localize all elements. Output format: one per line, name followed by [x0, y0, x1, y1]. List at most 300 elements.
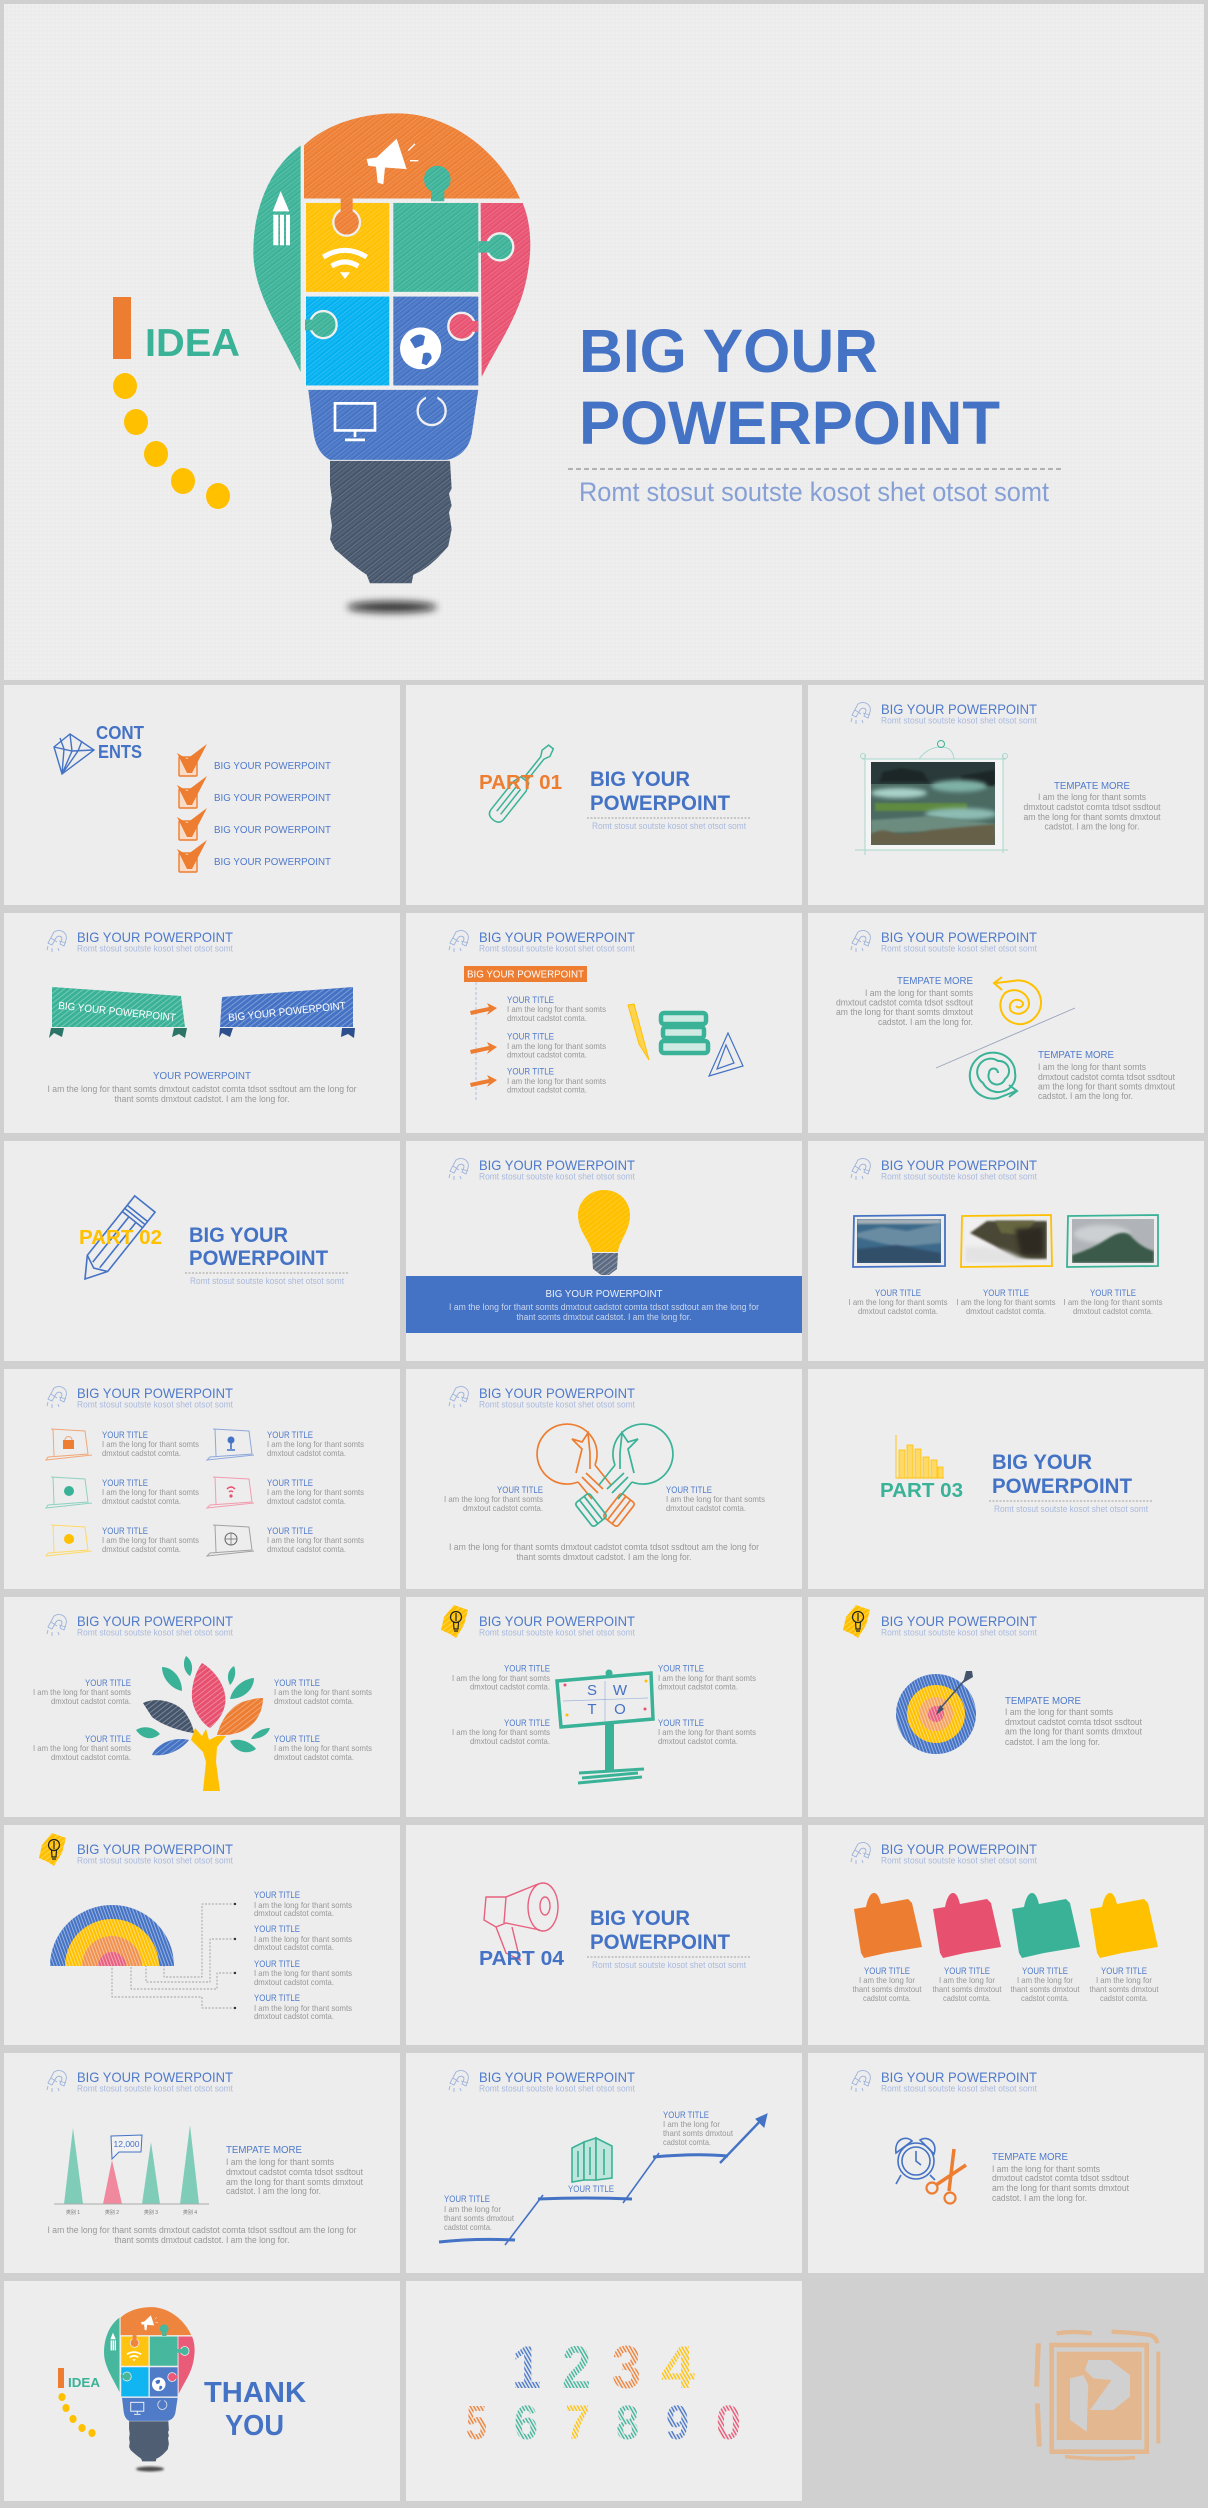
chart: 类别 1 [66, 2209, 80, 2216]
left texts [452, 1664, 550, 1746]
panel: staircase [406, 2053, 802, 2273]
panel: hanging picture [808, 685, 1204, 905]
text block [226, 2145, 363, 2196]
icon: books [661, 1013, 708, 1053]
panel: clock and scissors [808, 2053, 1204, 2273]
item texts: dmxtout cadstot comta. [254, 2011, 334, 2021]
header: BIG YOUR POWERPOINT [77, 2069, 233, 2085]
icon: bar chart [896, 1435, 944, 1478]
photo: green mountain [1067, 1215, 1158, 1267]
text block: TEMPATE MORE [1054, 781, 1130, 792]
left text: thant somts dmxtout [444, 2213, 515, 2223]
captions: thant somts dmxtout [932, 1984, 1002, 1994]
right text [666, 1485, 765, 1513]
left text: YOUR TITLE [444, 2194, 490, 2205]
items: I am the long for thant somts [507, 1076, 606, 1086]
idea mark: IDEA [145, 322, 240, 365]
text block: cadstot. I am the long for. [992, 2193, 1087, 2203]
title: BIG YOUR [579, 317, 878, 385]
text block: bottom [1038, 1050, 1175, 1101]
item texts: dmxtout cadstot comta. [102, 1496, 181, 1506]
text block: dmxtout cadstot comta tdsot ssdtout [1005, 1717, 1142, 1727]
icon: rainbow [50, 1905, 174, 1966]
title: POWERPOINT [590, 1931, 730, 1954]
callout [111, 2135, 142, 2159]
chart: 类别 4 [183, 2209, 197, 2216]
icon: puzzle light bulb [103, 2306, 197, 2472]
item texts: YOUR TITLE [102, 1526, 148, 1537]
header: BIG YOUR POWERPOINT [881, 1157, 1037, 1173]
heading [96, 723, 144, 762]
item texts: YOUR TITLE [102, 1430, 148, 1441]
logo stamp [1037, 2332, 1158, 2459]
header [47, 1613, 233, 1638]
header: Romt stosut soutste kosot shet otsot somt [479, 1400, 635, 1410]
chart: 类别 2 [105, 2209, 119, 2216]
icon: pencil [628, 1004, 649, 1060]
left texts: YOUR TITLE [85, 1678, 131, 1689]
item texts: I am the long for thant somts [254, 1934, 352, 1944]
left text [444, 2194, 515, 2232]
panel: part 03 [808, 1369, 1204, 1589]
header: BIG YOUR POWERPOINT [77, 929, 233, 945]
heading: CONT [96, 723, 144, 743]
icon: yellow bulb [578, 1190, 630, 1275]
header [851, 701, 1037, 726]
title: POWERPOINT [579, 389, 1000, 457]
text block: top: am the long for thant somts dmxtout [836, 1007, 973, 1017]
captions: YOUR TITLE [983, 1288, 1029, 1299]
checklist: BIG YOUR POWERPOINT [214, 760, 332, 772]
right texts [658, 1664, 756, 1746]
header: Romt stosut soutste kosot shet otsot somt [77, 1856, 233, 1866]
left text [444, 1485, 543, 1513]
chart [54, 2125, 209, 2216]
connectors [112, 1903, 236, 2009]
callout: 12,000 [114, 2140, 140, 2149]
text block: I am the long for thant somts [992, 2164, 1100, 2174]
item texts: dmxtout cadstot comta. [267, 1544, 346, 1554]
photo: blue mountains [853, 1215, 945, 1267]
item texts: dmxtout cadstot comta. [267, 1496, 346, 1506]
subtitle: Romt stosut soutste kosot shet otsot somt [579, 477, 1049, 507]
left texts: I am the long for thant somts [33, 1687, 131, 1697]
numbers row 2: 9 [666, 2397, 689, 2450]
header: BIG YOUR POWERPOINT [77, 1613, 233, 1629]
captions: I am the long for thant somts [1064, 1297, 1162, 1307]
header [47, 1385, 233, 1410]
idea mark: IDEA [68, 2375, 101, 2390]
title [204, 2377, 306, 2442]
captions: I am the long for [859, 1975, 915, 1985]
panel: thank you [4, 2281, 400, 2501]
right text: I am the long for thant somts [666, 1494, 765, 1504]
items: YOUR TITLE [507, 1066, 554, 1078]
text block: top [836, 976, 973, 1027]
text block: bottom: TEMPATE MORE [1038, 1050, 1114, 1061]
right texts: dmxtout cadstot comta. [658, 1682, 738, 1692]
text block [1005, 1696, 1142, 1747]
right texts: YOUR TITLE [274, 1734, 320, 1745]
text block: TEMPATE MORE [1005, 1696, 1081, 1707]
right texts: dmxtout cadstot comta. [274, 1696, 354, 1706]
captions: YOUR TITLE [1022, 1966, 1068, 1977]
item texts: dmxtout cadstot comta. [102, 1448, 181, 1458]
checklist: BIG YOUR POWERPOINT [214, 792, 332, 804]
panel: ribbons [4, 913, 400, 1133]
icon: set square [709, 1033, 743, 1076]
header: Romt stosut soutste kosot shet otsot somt [77, 1628, 233, 1638]
header [851, 1157, 1037, 1182]
header [851, 929, 1037, 954]
panel: contents [4, 685, 400, 905]
right texts: YOUR TITLE [658, 1664, 704, 1674]
band text: thant somts dmxtout cadstot. I am the long for. [516, 1312, 692, 1322]
captions: I am the long for [1096, 1975, 1152, 1985]
text block [1024, 781, 1161, 832]
header [449, 1157, 635, 1182]
text block: bottom: cadstot. I am the long for. [1038, 1091, 1133, 1101]
right text [663, 2110, 734, 2147]
text block: YOUR POWERPOINT [153, 1071, 251, 1082]
item texts: I am the long for thant somts [102, 1535, 199, 1545]
items: I am the long for thant somts [507, 1004, 606, 1014]
text block: bottom: dmxtout cadstot comta tdsot ssdtout [1038, 1072, 1175, 1082]
subtitle: Romt stosut soutste kosot shet otsot somt [190, 1276, 344, 1286]
captions: I am the long for thant somts [848, 1297, 948, 1307]
captions: dmxtout cadstot comta. [966, 1306, 1046, 1316]
item texts [254, 1890, 352, 2021]
orange label: BIG YOUR POWERPOINT [467, 968, 585, 980]
panel: six icon items [4, 1369, 400, 1589]
left texts: YOUR TITLE [504, 1718, 550, 1729]
panel: tree [4, 1597, 400, 1817]
text block: cadstot. I am the long for. [1044, 822, 1140, 832]
icon: yellow spiral [994, 977, 1041, 1024]
book caption: YOUR TITLE [568, 2184, 614, 2195]
header: Romt stosut soutste kosot shet otsot somt [479, 2084, 635, 2094]
icon: billboard: S [587, 1682, 597, 1699]
bottom text [48, 2225, 356, 2245]
text block: I am the long for thant somts [1038, 792, 1146, 802]
photo: cliff in fog [961, 1215, 1052, 1267]
header: Romt stosut soutste kosot shet otsot somt [881, 716, 1037, 726]
header: Romt stosut soutste kosot shet otsot somt [479, 1628, 635, 1638]
item texts: YOUR TITLE [267, 1430, 313, 1441]
right text: I am the long for [663, 2119, 720, 2129]
text block: top: I am the long for thant somts [865, 988, 973, 998]
items: dmxtout cadstot comta. [507, 1013, 587, 1023]
captions: dmxtout cadstot comta. [858, 1306, 938, 1316]
header: BIG YOUR POWERPOINT [881, 1841, 1037, 1857]
text block [48, 1071, 356, 1104]
item texts: YOUR TITLE [254, 1890, 300, 1901]
item texts: dmxtout cadstot comta. [254, 1977, 334, 1987]
band text: I am the long for thant somts dmxtout cadstot comta tdsot ssdtout am the long for [449, 1302, 759, 1312]
header [843, 1605, 1037, 1638]
captions: cadstot comta. [1100, 1993, 1148, 2003]
header: Romt stosut soutste kosot shet otsot somt [881, 2084, 1037, 2094]
part label: PART 02 [79, 1227, 162, 1249]
header: Romt stosut soutste kosot shet otsot somt [77, 2084, 233, 2094]
numbers row 2: 7 [565, 2397, 590, 2450]
header: Romt stosut soutste kosot shet otsot somt [881, 1856, 1037, 1866]
left texts: YOUR TITLE [85, 1734, 131, 1745]
panel: part 02 [4, 1141, 400, 1361]
item texts: I am the long for thant somts [102, 1439, 199, 1449]
text block: cadstot. I am the long for. [226, 2186, 321, 2196]
icon: target [896, 1671, 976, 1754]
captions: I am the long for thant somts [956, 1297, 1056, 1307]
text block: top: dmxtout cadstot comta tdsot ssdtout [836, 998, 973, 1008]
checklist: BIG YOUR POWERPOINT [214, 856, 332, 868]
item texts: I am the long for thant somts [254, 2003, 352, 2013]
icon: teal spiral [970, 1053, 1017, 1099]
text block: dmxtout cadstot comta tdsot ssdtout [1024, 802, 1161, 812]
header: BIG YOUR POWERPOINT [479, 929, 635, 945]
captions [852, 1966, 1159, 2003]
header [449, 929, 635, 954]
header: BIG YOUR POWERPOINT [479, 1385, 635, 1401]
icon: billboard: W [613, 1682, 628, 1699]
header [851, 2069, 1037, 2094]
photo [871, 762, 995, 845]
icon: billboard: T [587, 1701, 597, 1718]
captions: thant somts dmxtout [1090, 1984, 1159, 1994]
header: BIG YOUR POWERPOINT [479, 1613, 635, 1629]
left texts: I am the long for thant somts [33, 1743, 131, 1753]
title: BIG YOUR [189, 1224, 288, 1247]
header: BIG YOUR POWERPOINT [881, 701, 1037, 717]
left texts: dmxtout cadstot comta. [51, 1752, 131, 1762]
left text: I am the long for thant somts [444, 1494, 543, 1504]
title: YOU [225, 2410, 284, 2442]
item texts: YOUR TITLE [102, 1478, 148, 1489]
numbers row 2: 8 [616, 2397, 639, 2450]
title: THANK [204, 2377, 306, 2409]
left texts: dmxtout cadstot comta. [470, 1682, 550, 1692]
left texts: I am the long for thant somts [452, 1673, 550, 1683]
ribbon: blue: BIG YOUR POWERPOINT [228, 1000, 347, 1024]
numbers row 1: 4 [661, 2334, 696, 2401]
items: I am the long for thant somts [507, 1041, 606, 1051]
left texts: I am the long for thant somts [452, 1727, 550, 1737]
chart: 类别 3 [144, 2209, 158, 2216]
left text: I am the long for [444, 2204, 501, 2214]
subtitle: Romt stosut soutste kosot shet otsot somt [592, 1960, 746, 1970]
item texts: I am the long for thant somts [267, 1535, 364, 1545]
text block: dmxtout cadstot comta tdsot ssdtout [992, 2173, 1129, 2183]
item texts: I am the long for thant somts [267, 1439, 364, 1449]
header: Romt stosut soutste kosot shet otsot somt [479, 1172, 635, 1182]
left texts [33, 1678, 131, 1762]
header [449, 1385, 635, 1410]
right text: dmxtout cadstot comta. [666, 1503, 746, 1513]
text block: I am the long for thant somts dmxtout cadstot comta tdsot ssdtout am the long for [48, 1084, 356, 1094]
item texts: dmxtout cadstot comta. [267, 1448, 346, 1458]
bottom text [449, 1542, 759, 1562]
idea mark [58, 2368, 101, 2390]
text block: am the long for thant somts dmxtout [992, 2183, 1129, 2193]
right texts: I am the long for thant somts [274, 1687, 372, 1697]
text block: am the long for thant somts dmxtout [226, 2177, 363, 2187]
left texts: dmxtout cadstot comta. [51, 1696, 131, 1706]
text block: am the long for thant somts dmxtout [1005, 1726, 1142, 1736]
text block: am the long for thant somts dmxtout [1024, 812, 1161, 822]
icon: handshake bulbs [537, 1424, 673, 1527]
header: Romt stosut soutste kosot shet otsot somt [77, 944, 233, 954]
header [851, 1841, 1037, 1866]
title: BIG YOUR [590, 1907, 690, 1930]
item texts: YOUR TITLE [267, 1478, 313, 1489]
title [189, 1224, 328, 1270]
item texts [102, 1430, 364, 1554]
ribbon: teal: BIG YOUR POWERPOINT [58, 1000, 177, 1024]
captions: I am the long for [939, 1975, 995, 1985]
header: BIG YOUR POWERPOINT [881, 929, 1037, 945]
header: Romt stosut soutste kosot shet otsot somt [881, 944, 1037, 954]
icon: puzzle light bulb [250, 110, 537, 612]
header [47, 929, 233, 954]
right texts: I am the long for thant somts [658, 1673, 756, 1683]
item texts: YOUR TITLE [254, 1993, 300, 2004]
captions: thant somts dmxtout [852, 1984, 922, 1994]
band [406, 1276, 802, 1333]
picture frame [855, 740, 1008, 855]
captions [848, 1288, 1162, 1316]
panel: three photos [808, 1141, 1204, 1361]
title [590, 1907, 730, 1954]
subtitle: Romt stosut soutste kosot shet otsot somt [994, 1504, 1148, 1514]
part label: PART 04 [479, 1948, 565, 1970]
panel: target [808, 1597, 1204, 1817]
panel: four notes [808, 1825, 1204, 2045]
ribbon: teal [49, 987, 187, 1038]
text block: top: TEMPATE MORE [897, 976, 973, 987]
captions: YOUR TITLE [1101, 1966, 1147, 1977]
yellow dots [113, 373, 230, 509]
panel: handshake bulbs [406, 1369, 802, 1589]
band text: BIG YOUR POWERPOINT [546, 1288, 663, 1300]
numbers row 1: 3 [612, 2334, 641, 2401]
text block: I am the long for thant somts [1005, 1707, 1113, 1717]
right texts: I am the long for thant somts [658, 1727, 756, 1737]
header: BIG YOUR POWERPOINT [881, 1613, 1037, 1629]
items: YOUR TITLE [507, 995, 554, 1006]
panel: blue band [406, 1141, 802, 1361]
panel: timeline list [406, 913, 802, 1133]
checklist [177, 744, 332, 872]
text block: dmxtout cadstot comta tdsot ssdtout [226, 2167, 363, 2177]
numbers row 2 [466, 2397, 741, 2450]
right texts: YOUR TITLE [274, 1678, 320, 1689]
captions: cadstot comta. [863, 1993, 911, 2003]
icon: scissors [926, 2149, 966, 2204]
numbers row 2: 0 [716, 2397, 741, 2450]
icon: billboard [557, 1670, 653, 1783]
captions: thant somts dmxtout [1010, 1984, 1080, 1994]
left texts: YOUR TITLE [504, 1664, 550, 1674]
text block: cadstot. I am the long for. [1005, 1737, 1100, 1747]
icon: tree of leaves [136, 1656, 270, 1791]
captions: cadstot comta. [1021, 1993, 1069, 2003]
text block: TEMPATE MORE [226, 2145, 302, 2156]
checklist: BIG YOUR POWERPOINT [214, 824, 332, 836]
title [590, 768, 730, 815]
part label: PART 03 [880, 1480, 963, 1502]
subtitle: Romt stosut soutste kosot shet otsot somt [592, 821, 746, 831]
right texts [274, 1678, 372, 1762]
icon: megaphone [484, 1883, 558, 1960]
text block: I am the long for thant somts [226, 2157, 334, 2167]
captions: I am the long for [1017, 1975, 1073, 1985]
text block: bottom: I am the long for thant somts [1038, 1062, 1146, 1072]
header: BIG YOUR POWERPOINT [77, 1841, 233, 1857]
text block: thant somts dmxtout cadstot. I am the long for. [114, 1094, 290, 1104]
panel: hero slide [4, 4, 1204, 680]
heading: ENTS [98, 742, 142, 762]
captions: YOUR TITLE [944, 1966, 990, 1977]
right texts: dmxtout cadstot comta. [274, 1752, 354, 1762]
bottom text: thant somts dmxtout cadstot. I am the long for. [114, 2235, 290, 2245]
icon: clock [896, 2138, 935, 2184]
numbers row 2: 5 [466, 2397, 487, 2450]
ribbon: blue [219, 987, 355, 1038]
item texts: I am the long for thant somts [102, 1487, 199, 1497]
right texts: I am the long for thant somts [274, 1743, 372, 1753]
title: BIG YOUR [992, 1451, 1092, 1474]
item texts: I am the long for thant somts [254, 1900, 352, 1910]
panel: spirals [808, 913, 1204, 1133]
header: Romt stosut soutste kosot shet otsot somt [479, 944, 635, 954]
icon: diamond [54, 734, 94, 774]
arrows [470, 982, 497, 1100]
panel: part 01 [406, 685, 802, 905]
item texts: YOUR TITLE [254, 1924, 300, 1935]
items: dmxtout cadstot comta. [507, 1050, 587, 1060]
header: Romt stosut soutste kosot shet otsot somt [881, 1628, 1037, 1638]
bottom text: I am the long for thant somts dmxtout cadstot comta tdsot ssdtout am the long for [48, 2225, 356, 2235]
item texts: dmxtout cadstot comta. [254, 1942, 334, 1952]
notes [854, 1893, 1158, 1958]
bottom text: thant somts dmxtout cadstot. I am the long for. [516, 1552, 692, 1562]
header: Romt stosut soutste kosot shet otsot somt [881, 1172, 1037, 1182]
text block: TEMPATE MORE [992, 2152, 1068, 2163]
left texts: dmxtout cadstot comta. [470, 1736, 550, 1746]
title: POWERPOINT [189, 1247, 328, 1270]
right texts: YOUR TITLE [658, 1718, 704, 1729]
items: YOUR TITLE [507, 1032, 554, 1042]
numbers row 2: 6 [514, 2397, 538, 2450]
header: BIG YOUR POWERPOINT [479, 1157, 635, 1173]
panel: part 04 [406, 1825, 802, 2045]
text block [992, 2152, 1129, 2203]
header: BIG YOUR POWERPOINT [77, 1385, 233, 1401]
left text: YOUR TITLE [497, 1485, 543, 1496]
header: BIG YOUR POWERPOINT [881, 2069, 1037, 2085]
header [449, 2069, 635, 2094]
icon: pencil [75, 1196, 155, 1287]
captions: YOUR TITLE [864, 1966, 910, 1977]
captions: YOUR TITLE [875, 1288, 921, 1299]
bottom text: I am the long for thant somts dmxtout cadstot comta tdsot ssdtout am the long for [449, 1542, 759, 1552]
right text: YOUR TITLE [666, 1485, 712, 1496]
left text: cadstot comta. [444, 2222, 492, 2232]
header: Romt stosut soutste kosot shet otsot somt [77, 1400, 233, 1410]
icon: books [572, 2138, 612, 2182]
item texts: dmxtout cadstot comta. [254, 1908, 334, 1918]
items [507, 995, 606, 1094]
